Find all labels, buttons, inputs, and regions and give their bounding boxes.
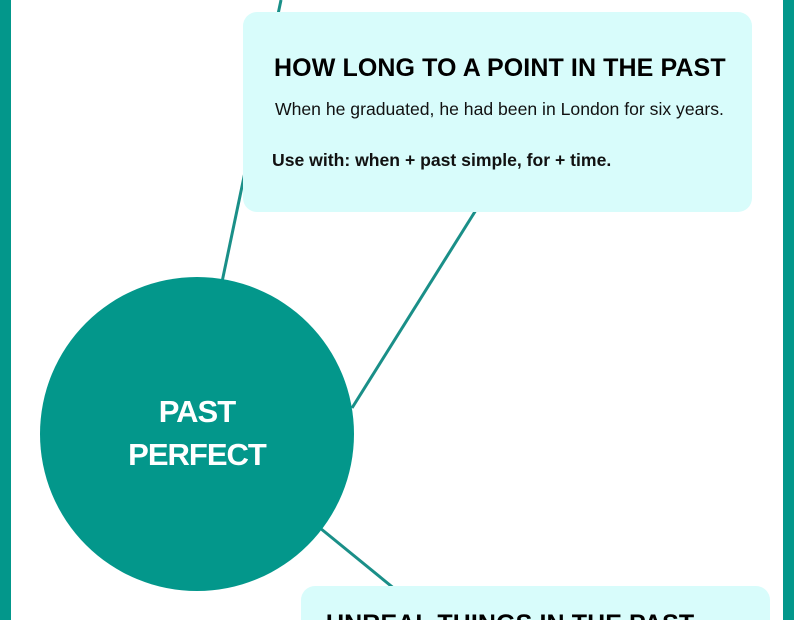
circle label: PERFECT <box>128 437 266 472</box>
left border <box>0 0 11 620</box>
usage note: Use with: when + past simple, for + time. <box>272 150 611 170</box>
heading: HOW LONG TO A POINT IN THE PAST <box>274 54 726 82</box>
example sentence: When he graduated, he had been in London for six years. <box>275 99 724 119</box>
circle label <box>128 394 266 472</box>
circle: past perfect <box>40 277 354 591</box>
panel: unreal things in the past <box>301 586 770 620</box>
circle label: PAST <box>159 394 235 429</box>
right border <box>783 0 794 620</box>
panel: how long to a point in the past <box>243 12 752 212</box>
